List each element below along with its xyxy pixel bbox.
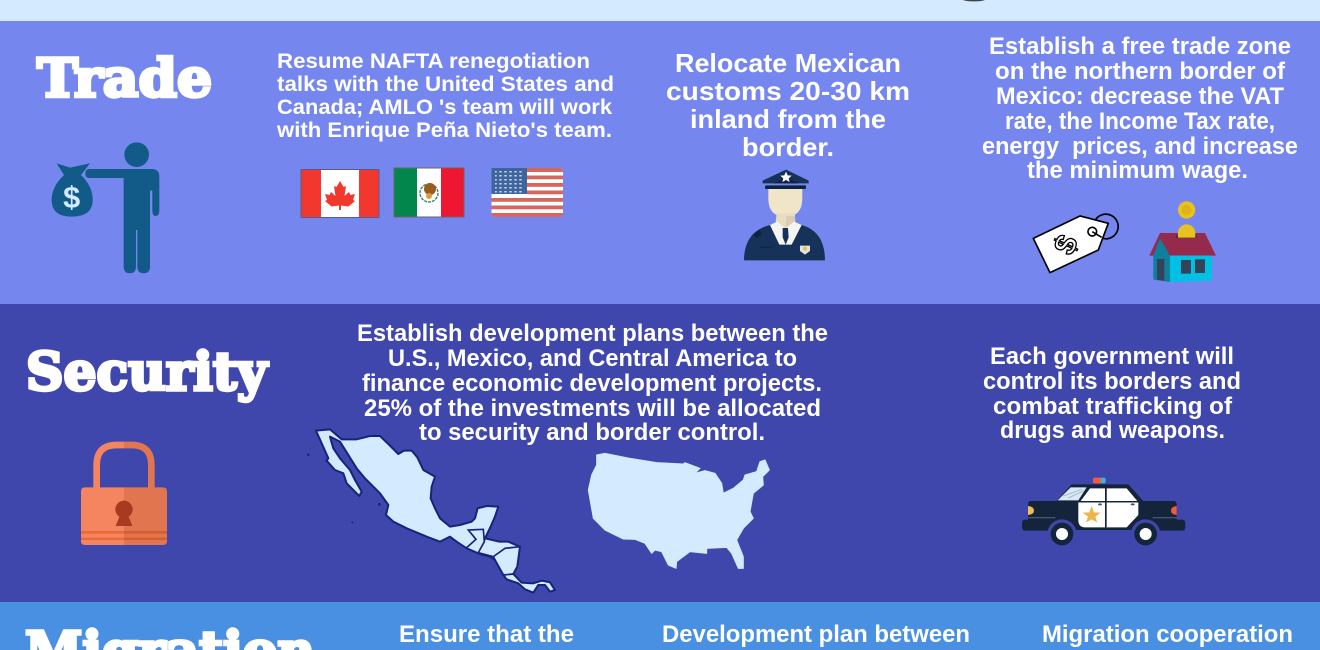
- icon: padlock: [81, 445, 167, 545]
- text: NAFTA talks: [276, 50, 614, 142]
- text: development plan between: Development plan between: [662, 621, 970, 648]
- text: border control: Each government will: [990, 343, 1234, 370]
- text: free trade zone: energy prices, and increase: [982, 133, 1298, 160]
- text: free trade zone: Establish a free trade zone: [989, 33, 1291, 60]
- icon: flag of Canada: [301, 170, 379, 218]
- text: border control: drugs and weapons.: [1000, 417, 1225, 444]
- text: development plans: [357, 320, 828, 446]
- text: free trade zone: [982, 33, 1298, 184]
- icon: house with coins: [1149, 201, 1216, 282]
- top band: [0, 0, 1320, 21]
- text: relocate customs: [666, 48, 910, 162]
- text: border control: control its borders and: [983, 368, 1241, 395]
- heading: trade: Trade: [37, 48, 212, 110]
- text: development plans: 25% of the investments will be allocated: [364, 395, 821, 422]
- text: NAFTA talks: talks with the United States and: [277, 73, 614, 96]
- text: relocate customs: inland from the: [690, 104, 886, 134]
- icon: police car: [1022, 478, 1185, 549]
- text: border control: [983, 343, 1241, 444]
- text: relocate customs: Relocate Mexican: [675, 48, 901, 78]
- text: free trade zone: on the northern border of: [995, 58, 1286, 85]
- panel: security: [0, 304, 1320, 602]
- text: free trade zone: rate, the Income Tax rate,: [1005, 108, 1275, 135]
- panel: migration: [0, 602, 1320, 650]
- text: free trade zone: Mexico: decrease the VAT: [996, 83, 1284, 110]
- text: development plans: U.S., Mexico, and Central America to: [388, 345, 797, 372]
- icon: person holding money bag: [52, 142, 159, 273]
- heading: security: Security: [26, 342, 269, 403]
- text: NAFTA talks: with Enrique Peña Nieto's team.: [276, 119, 612, 142]
- icon: price tag: [1033, 214, 1118, 273]
- text: border control: combat trafficking of: [993, 393, 1233, 420]
- icon: customs officer: [744, 170, 825, 260]
- icon: person holding money bag: $: [63, 180, 80, 214]
- text: NAFTA talks: Canada; AMLO 's team will work: [277, 96, 612, 119]
- map: Mexico and Central America: [307, 429, 555, 593]
- text: relocate customs: border.: [742, 132, 834, 162]
- text: development plans: finance economic development projects.: [362, 370, 822, 397]
- icon: flag of United States: [492, 168, 563, 217]
- text: relocate customs: customs 20-30 km: [666, 76, 910, 106]
- map: United States: [588, 453, 769, 568]
- text: free trade zone: the minimum wage.: [1027, 157, 1248, 184]
- text: migration cooperation: Migration cooperation: [1042, 621, 1293, 648]
- text: ensure that the: Ensure that the: [399, 621, 574, 648]
- icon: price tag: $: [1047, 230, 1085, 260]
- text: development plans: to security and border control.: [419, 419, 765, 446]
- text: development plans: Establish development plans between the: [357, 320, 828, 347]
- text: NAFTA talks: Resume NAFTA renegotiation: [277, 50, 590, 73]
- panel: trade: [0, 21, 1320, 304]
- icon: flag of Mexico: [394, 168, 464, 217]
